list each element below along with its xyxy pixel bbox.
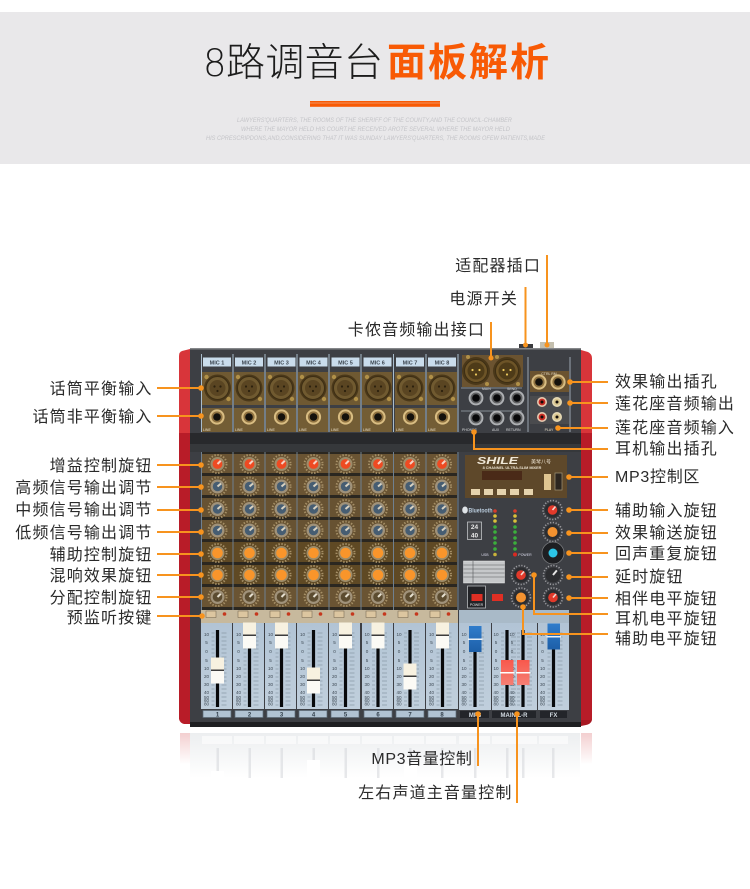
english caption: WHERE THE MAYOR HELD HIS COURT.HE RECEIVED AROTE SEVERAL WHERE THE MAYOR HELD [241, 127, 511, 133]
RCA connectors: PLAY [545, 428, 554, 432]
sample rate badge [468, 522, 482, 540]
title: 路调音台 [226, 42, 383, 85]
channel label tabs: MIC 3 [274, 360, 289, 366]
channel number tabs: 7 [408, 712, 412, 718]
channel number tabs: 3 [280, 712, 284, 718]
aux knobs [208, 544, 451, 562]
SHILE logo: SHILE [477, 455, 519, 467]
pan callout: 分配控制旋钮 [50, 589, 152, 607]
channel number tabs: 2 [248, 712, 252, 718]
USB and SD ports [544, 473, 562, 490]
panel: microphone inputs: LINE [299, 428, 307, 432]
english caption: LAWYERS'QUARTERS, THE ROOMS OF THE SHERIFF OF THE COUNTY,AND THE COUNCIL-CHAMBER [237, 118, 513, 124]
channel label tabs: MIC 2 [242, 360, 256, 366]
high frequency knobs [208, 478, 451, 496]
adapter port callout [455, 255, 550, 348]
panel: MP3 module: 美琴八号 [531, 458, 551, 466]
main volume callout [358, 711, 520, 803]
effect send knob callout: 效果输送旋钮 [615, 524, 718, 542]
main, aux and return jacks: SEND [507, 387, 517, 391]
title underline [310, 101, 440, 107]
panel: microphone inputs [202, 354, 458, 432]
MP3 volume callout [371, 711, 481, 768]
channel label tabs: MIC 4 [306, 360, 322, 366]
line jacks [209, 409, 450, 425]
pan callout [50, 589, 204, 607]
aux level callout: 辅助电平旋钮 [615, 630, 718, 648]
reverb callout [50, 567, 204, 585]
callouts: bottom labels [358, 711, 520, 803]
panel: microphone inputs: LINE [428, 428, 436, 432]
panel: microphone inputs: LINE [331, 428, 339, 432]
delay knob callout [566, 568, 684, 586]
channel label tabs: MIC 1 [210, 360, 224, 366]
aux level callout [520, 604, 718, 648]
LED level meter: POWER [518, 553, 532, 557]
panel: channel knobs [202, 452, 458, 610]
echo repeat knob callout: 回声重复旋钮 [615, 545, 718, 563]
panel: microphone inputs: LINE [363, 428, 371, 432]
pre listen callout [67, 609, 205, 627]
fader strip backgrounds [201, 623, 569, 710]
right column knobs [512, 500, 564, 607]
main, aux and return jacks [461, 387, 524, 432]
XLR connectors [204, 374, 456, 402]
LED level meter [481, 509, 532, 557]
panel: rear outputs [461, 355, 570, 432]
channel number tabs: MP3 [469, 713, 482, 719]
panel: fader section [201, 610, 569, 719]
aux input knob callout [566, 502, 718, 520]
low frequency knobs [208, 522, 451, 540]
main, aux and return jacks: PHONES [462, 428, 477, 432]
unbalanced mic input callout [32, 408, 204, 426]
effect spec table [464, 561, 504, 583]
mid frequency knobs [208, 500, 451, 518]
channel label tabs [203, 358, 456, 366]
high frequency callout [15, 479, 204, 497]
mid frequency callout [15, 501, 204, 519]
blue FX fader [546, 624, 561, 650]
effect send knob callout [566, 524, 718, 542]
panel: microphone inputs: LINE [203, 428, 211, 432]
power switch callout: 电源开关 [449, 290, 518, 308]
red side panels [179, 349, 592, 726]
sample rate badge: 24 [471, 524, 478, 531]
channel number tabs: FX [550, 713, 557, 719]
unbalanced mic input callout: 话筒非平衡输入 [32, 408, 152, 426]
pan knobs [208, 588, 451, 606]
RCA input callout: 莲花座音频输入 [615, 419, 735, 437]
reverb knobs [208, 566, 451, 584]
mixer [179, 342, 592, 727]
XLR output callout: 卡侬音频输出接口 [348, 321, 485, 339]
white channel faders [211, 622, 449, 694]
english caption [206, 118, 546, 142]
panel: microphone inputs: LINE [267, 428, 275, 432]
channel number tabs: 8 [440, 712, 444, 718]
channel label tabs: MIC 5 [338, 360, 353, 366]
MP3 control callout: MP3控制区 [615, 468, 700, 486]
reverb callout: 混响效果旋钮 [50, 567, 152, 585]
low frequency callout [15, 524, 204, 542]
dark chassis [190, 348, 581, 727]
headphone level callout [531, 572, 718, 628]
main, aux and return jacks: AUX [492, 428, 500, 432]
channel number tabs [203, 710, 567, 719]
main, aux and return jacks: RETURN [506, 428, 521, 432]
adapter port callout: 适配器插口 [455, 257, 541, 275]
accompaniment level callout [566, 590, 718, 608]
channel label tabs: MIC 7 [403, 360, 417, 366]
callouts: top labels [348, 255, 550, 360]
gain callout [50, 457, 204, 475]
XLR output callout [348, 321, 494, 360]
panel: MP3 module: 8 CHANNEL ULTRA-SLIM MIXER [483, 466, 542, 470]
blue MP3 fader [468, 626, 482, 652]
MP3 volume callout: MP3音量控制 [371, 750, 472, 768]
panel: control section [462, 500, 564, 608]
power switch: POWER [470, 603, 484, 607]
gain callout: 增益控制旋钮 [50, 457, 152, 475]
red main faders [500, 660, 530, 685]
callouts: right labels [471, 373, 735, 648]
channel number tabs: 4 [312, 712, 316, 718]
channel label tabs: MIC 6 [370, 360, 385, 366]
mixer reflection [180, 733, 592, 778]
accompaniment level callout: 相伴电平旋钮 [615, 590, 718, 608]
RCA output callout [567, 395, 735, 413]
MP3 buttons [471, 489, 533, 495]
bluetooth logo: Bluetooth [468, 508, 493, 514]
RCA input callout [555, 419, 735, 437]
MP3 control callout [566, 468, 700, 486]
knob row backgrounds [202, 452, 458, 610]
high frequency callout: 高频信号输出调节 [15, 479, 152, 497]
title [203, 42, 549, 85]
red solo button [492, 594, 503, 601]
title: 面板解析 [387, 42, 549, 85]
title: 8 [203, 42, 227, 85]
headphone output callout: 耳机输出插孔 [615, 440, 718, 458]
channel label tabs: MIC 8 [435, 360, 449, 366]
aux input knob callout: 辅助输入旋钮 [615, 502, 718, 520]
channel number tabs: 5 [344, 712, 348, 718]
headphone level callout: 耳机电平旋钮 [615, 610, 718, 628]
echo repeat knob callout [566, 545, 718, 563]
balanced mic input callout: 话筒平衡输入 [50, 380, 152, 398]
effect output jacks: CTRL RM [541, 372, 557, 376]
main volume callout: 左右声道主音量控制 [358, 784, 512, 802]
fader scales [204, 630, 562, 707]
header band [0, 12, 750, 164]
aux callout: 辅助控制旋钮 [50, 546, 152, 564]
english caption: HIS CPRESCRIPDONS,AND,CONSIDERING THAT IT WAS SUNDAY LAWYERS'QUARTERS, THE ROOMS OFEW PATIENTS,MADE [206, 136, 546, 142]
panel: microphone inputs: LINE [235, 428, 243, 432]
main, aux and return jacks: MAIN [482, 387, 491, 391]
panel: prefader listen row [201, 610, 458, 623]
balanced mic input callout [50, 380, 204, 398]
effect output callout [567, 373, 718, 391]
headphone output callout [471, 429, 718, 458]
channel number tabs: MAIN L-R [500, 713, 528, 719]
low frequency callout: 低频信号输出调节 [15, 524, 152, 542]
channel number tabs: 1 [216, 712, 220, 718]
power connectors on back [519, 342, 554, 349]
RCA output callout: 莲花座音频输出 [615, 395, 735, 413]
panel: microphone inputs: LINE [396, 428, 404, 432]
pre listen callout: 预监听按键 [67, 609, 152, 627]
mid frequency callout: 中频信号输出调节 [15, 501, 152, 519]
delay knob callout: 延时旋钮 [615, 568, 684, 586]
LED level meter: USB [481, 553, 489, 557]
brown connector panels [202, 354, 458, 432]
panel: MP3 module [465, 455, 567, 498]
effect output callout: 效果输出插孔 [615, 373, 718, 391]
main XLR outputs [462, 355, 523, 387]
channel number tabs: 6 [376, 712, 380, 718]
callouts: left labels [15, 380, 205, 627]
gain knobs [208, 455, 451, 473]
power switch callout [449, 287, 528, 348]
MP3 display [482, 471, 522, 480]
aux callout [50, 546, 204, 564]
sample rate badge: 40 [471, 532, 478, 540]
